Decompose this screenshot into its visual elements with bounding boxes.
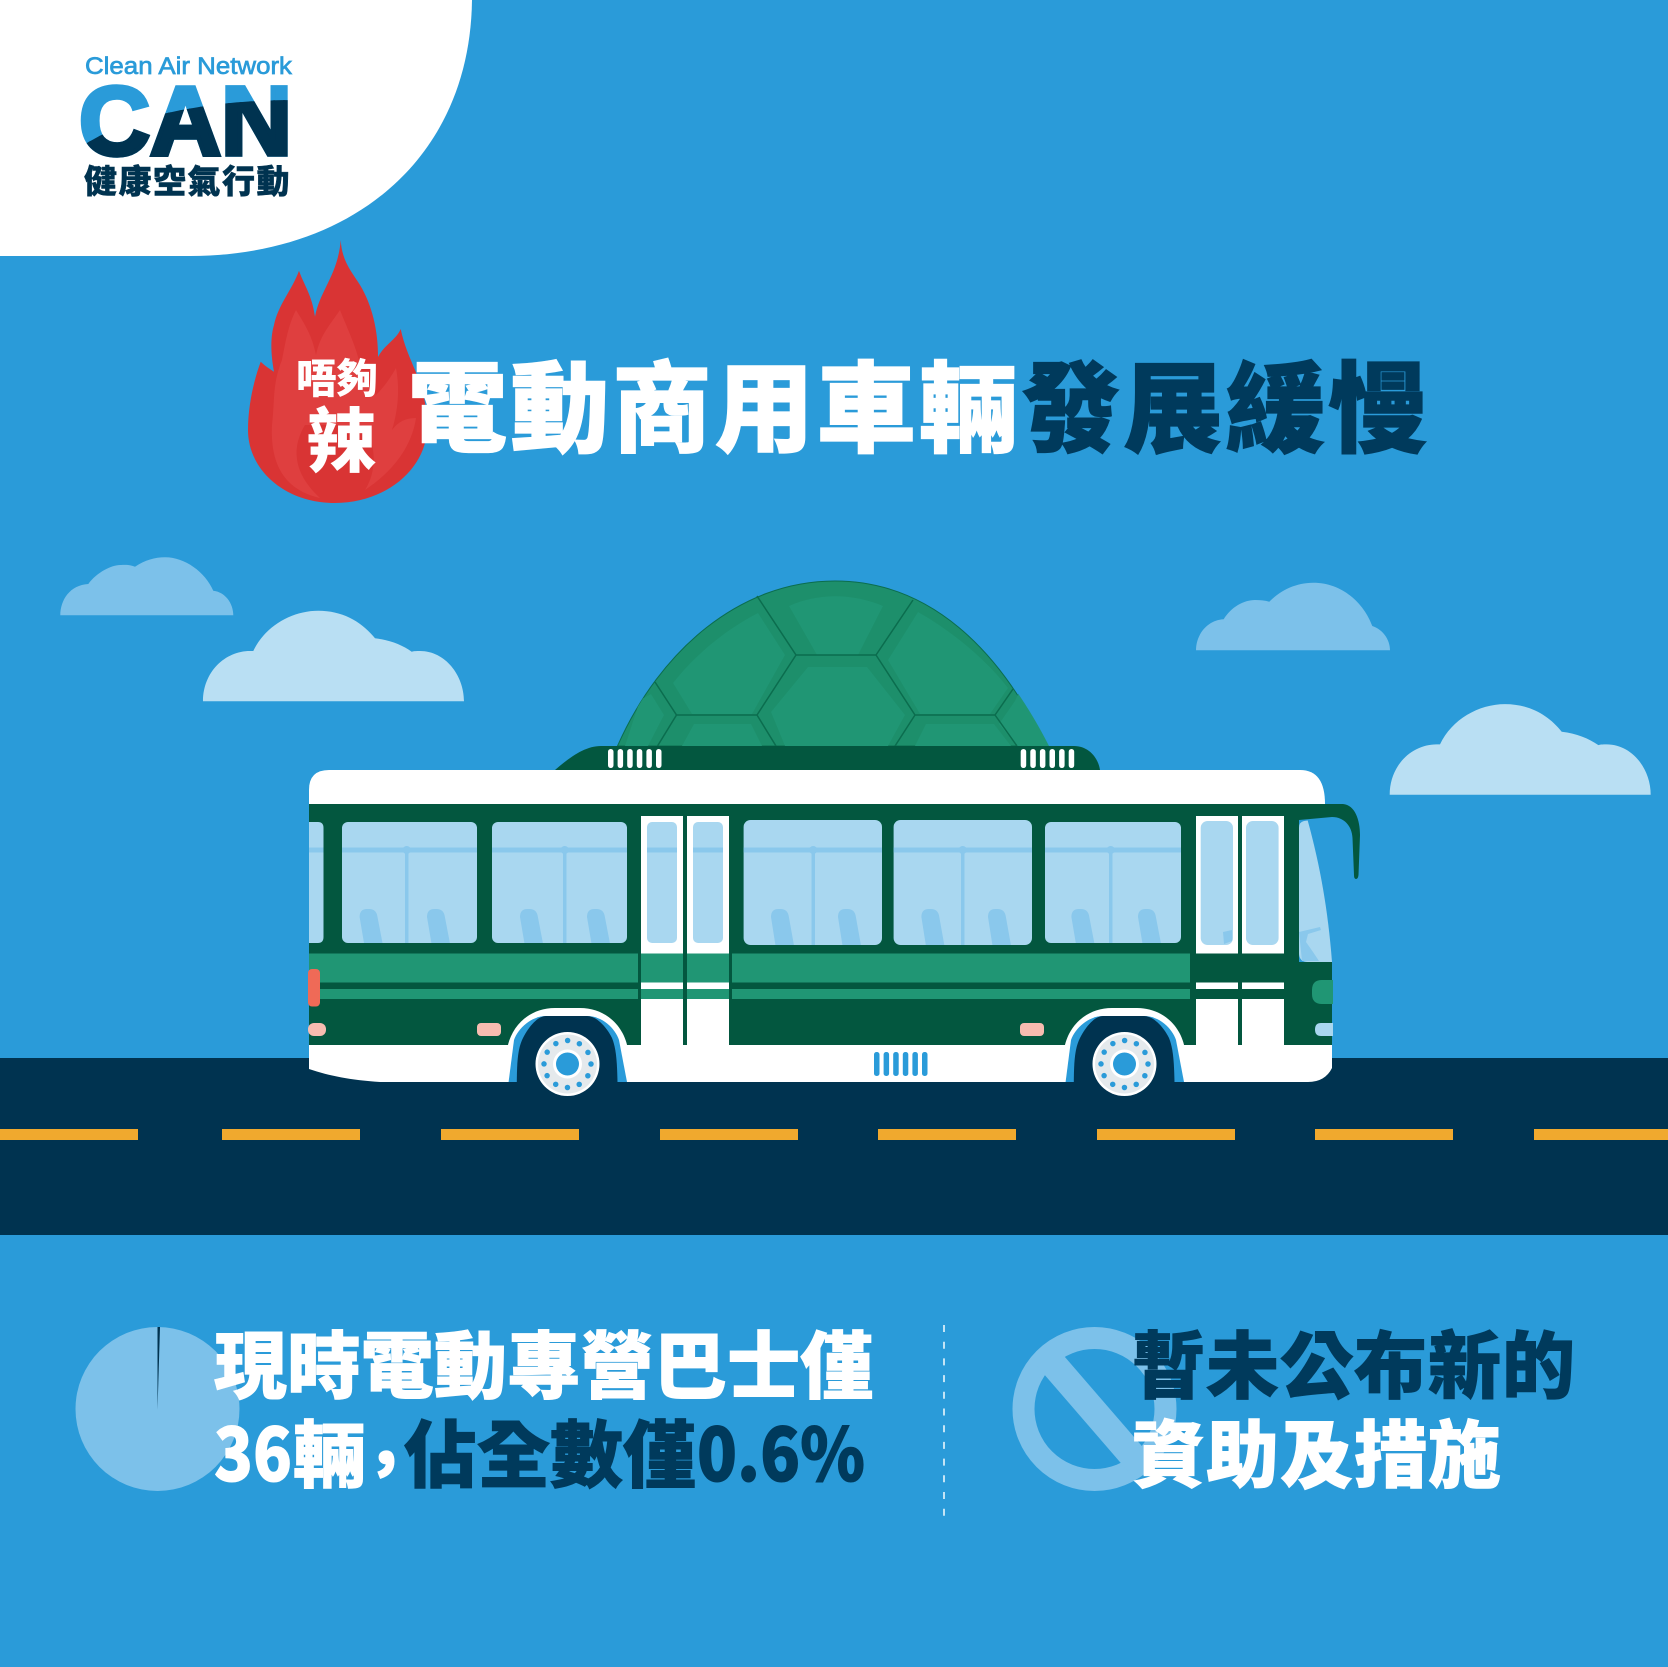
text: left statistic: ,	[375, 1392, 397, 1482]
green stripes	[309, 954, 1190, 999]
windows	[309, 820, 1332, 962]
turtle shell	[618, 581, 1050, 746]
icon: prohibition sign	[1024, 1338, 1166, 1480]
text: right statement	[1132, 1308, 1576, 1503]
cloud 3	[1196, 583, 1390, 650]
icon: flame with 唔夠辣: 辣	[306, 386, 376, 487]
rear door	[641, 816, 729, 1046]
lights	[308, 969, 1333, 1036]
rear wheel	[508, 1008, 628, 1096]
divider	[943, 1325, 945, 1516]
roof unit	[555, 746, 1100, 770]
icon: flame with 唔夠辣	[248, 240, 427, 503]
text: left statistic: 36	[214, 1397, 292, 1503]
lower grille	[874, 1052, 928, 1076]
logo: Clean Air Network CAN: 健康空氣行動	[84, 155, 291, 203]
text: right statement: 暫未公布新的	[1132, 1308, 1576, 1414]
title: 電動商用車輛發展緩慢	[408, 329, 1430, 473]
logo: Clean Air Network CAN: CAN	[79, 66, 292, 176]
text: left statistic	[214, 1308, 874, 1503]
text: left statistic: 現時電動專營巴士僅	[214, 1308, 874, 1414]
text: right statement: 資助及措施	[1132, 1397, 1502, 1503]
text: left statistic: 佔全數僅	[404, 1397, 696, 1503]
cloud 4	[1390, 704, 1651, 795]
front wheel	[1064, 1008, 1184, 1096]
logo: Clean Air Network CAN: Clean Air Network	[85, 53, 293, 80]
text: left statistic: 輛	[293, 1397, 366, 1503]
logo: Clean Air Network CAN: CAN	[79, 66, 292, 176]
pie chart: 0.6%	[76, 1327, 240, 1491]
logo panel: white corner	[0, 0, 472, 256]
window rails, poles and seats	[309, 846, 1321, 961]
road	[0, 1058, 1668, 1235]
text: left statistic: 0.6%	[697, 1397, 865, 1503]
bus body	[308, 770, 1360, 1082]
cloud 2	[203, 611, 464, 701]
icon: flame with 唔夠辣: 唔夠	[296, 345, 377, 405]
cloud 1	[60, 557, 233, 615]
front door	[1196, 816, 1284, 1046]
